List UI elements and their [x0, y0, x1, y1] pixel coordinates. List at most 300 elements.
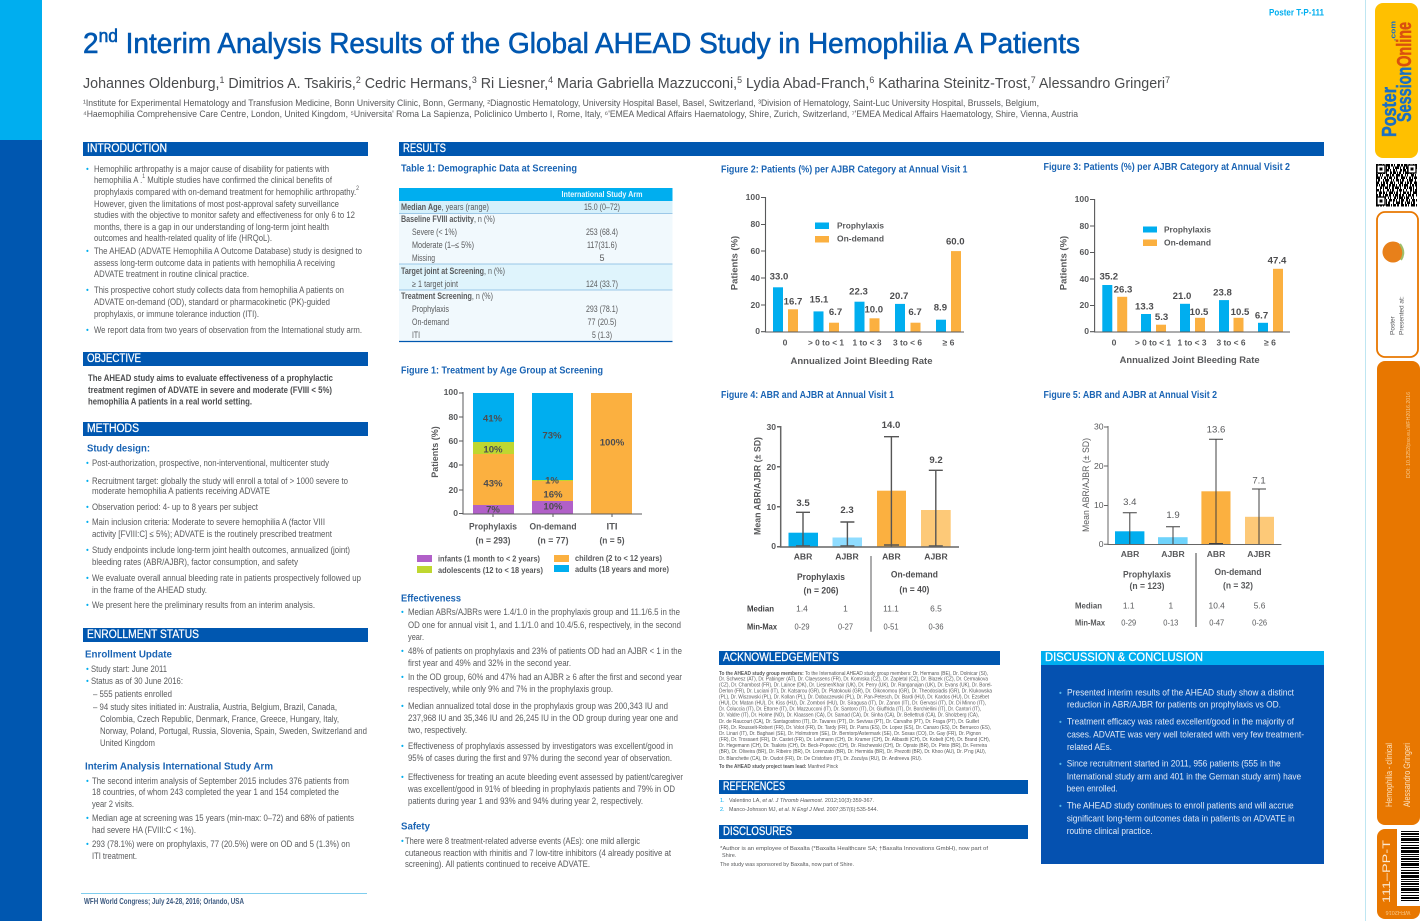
figure 1: treatment by age group: 16%: [543, 490, 563, 500]
panel: methods: We present here the preliminary results from an interim analysis.: [92, 600, 315, 610]
panel: acknowledgements: (FR), Dr. Rousselt-Robert (FR), Dr. Volot (FR), Dr. Tardy (FR), Dr. Parra (ES), Dr. Lopez (ES), Dr. Canaro (ES), Dr. Berrueco (ES),: [719, 725, 991, 731]
figure 1: treatment by age group: 100%: [600, 438, 625, 448]
figure 2: AJBR category visit 1: Prophylaxis: [837, 221, 884, 231]
panel: acknowledgements: (PL), Dr. Wiszowski (PL), Dr. Kollan (PL), Dr. Dobaczewski (PL), Dr. Pan-Petesch, Dr. Bardi (HU), Dr. Kardos (HU), Dr. Ezsébet: [719, 694, 990, 700]
figure 1: treatment by age group: 100: [444, 387, 458, 397]
panel: enrollment status: – 555 patients enrolled: [93, 689, 172, 699]
figure 4: ABR and AJBR visit 1: Mean ABR/AJBR (± SD): [752, 437, 764, 535]
figure 4: ABR and AJBR visit 1: ABR: [794, 552, 813, 562]
authors: 3: [472, 75, 477, 85]
figure 4: ABR and AJBR visit 1: On-demand: [891, 570, 938, 580]
text block: effectiveness and safety: [401, 594, 683, 869]
panel: methods: activity [FVIII:C] ≤ 5%); ADVATE is the routinely prescribed treatment: [92, 529, 332, 539]
figure 5: ABR and AJBR visit 2: 20: [1094, 461, 1104, 471]
panel: acknowledgements: Dr. Linari (IT), Dr. Baghaei (SE), Dr. Holmstrom (SE), Dr. Berntorp/Astermark (SE), Dr. Sosas (CO), Dr. Gay (FR), Dr. Pignon: [719, 731, 981, 737]
authors: Maria Gabriella Mazzucconi,: [553, 76, 737, 92]
figure 5: ABR and AJBR visit 2: On-demand: [1214, 567, 1262, 578]
figure 1: treatment by age group: ITI: [606, 522, 618, 532]
panel: enrollment status: ENROLLMENT STATUS: [87, 629, 199, 641]
figure 1: treatment by age group: Prophylaxis: [469, 522, 517, 532]
figure 2: AJBR category visit 1: 20: [750, 300, 760, 310]
icon: congress logo: [1382, 242, 1404, 262]
figure 5: ABR and AJBR visit 2: Median: [1075, 601, 1102, 611]
text block: effectiveness and safety: first year and 49% and 32% in the second year.: [408, 658, 571, 668]
panel: acknowledgements: (FR), Dr. Trossaert (FR), Dr. Castet (FR), Dr. Lehmann (CH), Dr. Kramer (CH), Dr. Alibastti (CH), Dr. Kobelt (CH), Dr. Brand (CH),: [719, 737, 990, 743]
panel: acknowledgements: ACKNOWLEDGEMENTS: [723, 652, 839, 664]
text block: effectiveness and safety: patients during year 1 and 93% and 94% during year 2, respectively.: [408, 796, 643, 806]
text block: effectiveness and safety: Effectiveness: [401, 594, 461, 604]
text block: effectiveness and safety: There were 8 treatment-related adverse events (AEs): one mild allergic: [405, 836, 640, 846]
panel: introduction: outcomes and health-related quality of life (HRQoL).: [94, 233, 272, 243]
figure 5: ABR and AJBR visit 2: 0-13: [1163, 618, 1179, 628]
figure 1: treatment by age group: 60: [448, 436, 458, 446]
text block: effectiveness and safety: OD one for annual visit 1, and 1.1/1.0 and 10.4/5.6, respectively, in the second: [408, 620, 681, 630]
figure 5: ABR and AJBR visit 2: Min-Max: [1075, 618, 1105, 628]
panel: acknowledgements: Dr. Blanchette (CA), Dr. Oudot (FR), Dr. De Cristofaro (IT), Dr. Zozulya (RU), Dr. Andreeva (RU).: [719, 756, 922, 762]
text block: effectiveness and safety: •: [401, 702, 404, 710]
panel: methods: Observation period: 4- up to 8 years per subject: [92, 502, 258, 512]
panel: introduction: •: [86, 246, 89, 256]
authors: Dimitrios A. Tsakiris,: [224, 76, 356, 92]
figure 2: AJBR category visit 1: Figure 2: Patients (%) per AJBR Category at Annual Visit 1: [721, 164, 968, 176]
table 1: demographic data: 77 (20.5): [588, 317, 616, 327]
results header: [399, 142, 1324, 156]
figure 5: ABR and AJBR visit 2: 13.6: [1207, 424, 1225, 436]
sidebar logo: PosterSessionOnline: Poster: [1379, 87, 1401, 137]
figure 3: AJBR category visit 2: 13.3: [1135, 302, 1154, 312]
panel: enrollment status: 18 countries, of whom 243 completed the year 1 and 154 completed the: [92, 787, 339, 797]
panel: methods: moderate hemophilia A patients receiving ADVATE: [92, 486, 270, 496]
figure 4: ABR and AJBR visit 1: 0-51: [884, 622, 899, 632]
authors: Johannes Oldenburg,: [83, 76, 222, 92]
figure 2: AJBR category visit 1: 10.0: [864, 304, 883, 316]
panel: enrollment status: •: [86, 776, 89, 786]
figure 5: ABR and AJBR visit 2: 1.9: [1166, 510, 1180, 521]
table 1: demographic data: Missing: [412, 253, 435, 263]
figure 3: AJBR category visit 2: On-demand: [1164, 238, 1211, 248]
figure 3: AJBR category visit 2: > 0 to < 1: [1135, 338, 1171, 348]
figure 4: ABR and AJBR visit 1: Min-Max: [747, 622, 777, 632]
text block: effectiveness and safety: respectively, while only 9% and 7% in the prophylaxis group.: [408, 684, 613, 694]
figure 3: AJBR category visit 2: Figure 3: Patients (%) per AJBR Category at Annual Visit 2: [1044, 162, 1290, 173]
panel: discussion and conclusion: [1041, 651, 1324, 864]
figure 4: ABR and AJBR visit 1: 10: [766, 502, 776, 512]
figure 2: AJBR category visit 1: 0: [755, 326, 760, 336]
figure 5: ABR and AJBR visit 2: 1.1: [1123, 601, 1135, 611]
panel: discussion and conclusion: significant long-term outcomes data in patients on ADVATE in: [1067, 814, 1295, 824]
panel: methods: METHODS: [87, 423, 139, 435]
panel: enrollment status: Status as of 30 June 2016:: [91, 676, 183, 686]
figure 1: treatment by age group: Patients (%): [430, 426, 440, 478]
table 1: demographic data: Median Age, years (range): [401, 202, 489, 212]
panel: objective: The AHEAD study aims to evaluate effectiveness of a prophylactic: [88, 373, 333, 383]
figure 4: ABR and AJBR visit 1: Median: [747, 604, 774, 614]
panel: introduction: hemophilia A .: [94, 175, 150, 185]
panel: acknowledgements: Dr. Valdre (IT), Dr. Holme (NO), Dr. Klaassen (CA), Dr. Samad (CA), Dr. Sinha (CA), Dr. Bellettruti (CA), Dr. Sholzberg (CA),: [719, 712, 979, 718]
figure 1: treatment by age group: (n = 5): [600, 536, 624, 546]
text block: effectiveness and safety: •: [401, 672, 404, 682]
panel: enrollment status: •: [86, 664, 89, 674]
sidebar divider line: [1364, 0, 1366, 921]
figure 5: ABR and AJBR visit 2: 0-26: [1252, 618, 1267, 628]
figure 4: ABR and AJBR visit 1: AJBR: [924, 552, 948, 562]
figure 1: treatment by age group: (n = 77): [538, 536, 568, 546]
panel: enrollment status: The second interim analysis of September 2015 includes 376 patients from: [92, 776, 349, 786]
panel: discussion and conclusion: Presented interim results of the AHEAD study show a distinct: [1067, 688, 1294, 698]
figure 2: AJBR category visit 1: On-demand: [837, 234, 884, 244]
authors: 1: [219, 75, 224, 85]
figure 1: treatment by age group: 40: [448, 460, 458, 470]
figure 5: ABR and AJBR visit 2: ABR: [1121, 549, 1140, 559]
figure 2: AJBR category visit 1: 60.0: [946, 236, 965, 248]
table 1: demographic data: 5 (1.3): [592, 330, 612, 340]
panel: enrollment status: •: [86, 814, 89, 822]
panel: introduction: However, given the limitations of most post-approval safety surveillance: [94, 199, 339, 209]
figure 4: ABR and AJBR visit 1: 11.1: [883, 604, 899, 614]
table 1: demographic data: 253 (68.4): [586, 227, 618, 237]
panel: enrollment status: ITI treatment.: [92, 851, 137, 861]
presented-at card: Poster: [1390, 315, 1396, 335]
panel: acknowledgements: (BR), Dr. Oliveira (BR), Dr. Ribeiro (BR), Dr. Lorenzato (BR), Dr. Hermida (BR), Dr. Prezotti (BR), Dr. Khoo (AU), Dr. P'ng (AU),: [719, 749, 986, 755]
figure 1: treatment by age group: infants (1 month to < 2 years): [438, 554, 540, 564]
figure 2: AJBR category visit 1: 6.7: [908, 307, 922, 318]
panel: methods: •: [86, 518, 89, 526]
figure 4: ABR and AJBR visit 1: 6.5: [930, 604, 942, 614]
panel: discussion and conclusion: reduction in ABR/AJBR for patients on prophylaxis vs OD.: [1067, 700, 1281, 710]
figure 4: ABR and AJBR visit 1: Figure 4: ABR and AJBR at Annual Visit 1: [721, 390, 894, 401]
figure 5: ABR and AJBR visit 2: (n = 123): [1130, 581, 1164, 592]
panel: acknowledgements: Dr. Hegemann (CH), Dr. Tsakiris (CH), Dr. Beck-Popovic (CH), Dr. Rischewski (CH), Dr. Oprato (BR), Dr. Pinto (BR), Dr. Ferreira: [719, 743, 987, 749]
panel: introduction: •: [86, 326, 89, 334]
table 1: demographic data: Baseline FVIII activity, n (%): [401, 214, 495, 224]
authors: 6: [869, 75, 874, 85]
text block: effectiveness and safety: cutaneous reaction with rhinitis and 7 low-titre inhibitors (4 already positive at: [405, 848, 671, 858]
figure 2: AJBR category visit 1: > 0 to < 1: [808, 338, 844, 348]
panel: enrollment status: •: [86, 840, 89, 848]
figure 5: ABR and AJBR visit 2: 3.4: [1123, 497, 1137, 508]
table 1: demographic data: 5: [599, 253, 605, 263]
panel: discussion and conclusion: •: [1059, 802, 1062, 810]
figure 1: treatment by age group: adults (18 years and more): [575, 564, 669, 574]
sidebar logo: PosterSessionOnline: .com: [1390, 21, 1398, 41]
panel: methods: Recruitment target: globally the study will enroll a total of > 1000 severe to: [92, 476, 348, 486]
panel: disclosures: [719, 825, 1028, 868]
figure 5: ABR and AJBR visit 2: ABR: [1207, 549, 1226, 559]
text block: effectiveness and safety: two, respectively.: [408, 725, 467, 735]
text block: effectiveness and safety: Median ABRs/AJBRs were 1.4/1.0 in the prophylaxis group and 11.1/6.5 in the: [408, 607, 680, 617]
figure 4: ABR and AJBR visit 1: 0-29: [794, 622, 810, 632]
figure 3: AJBR category visit 2: 20: [1079, 300, 1089, 310]
panel: acknowledgements: To the AHEAD study project team lead: Manfred Pinck: [719, 764, 838, 770]
table 1: demographic data: 293 (78.1): [586, 304, 618, 314]
panel: enrollment status: Study start: June 2011: [91, 664, 167, 674]
figure 4: ABR and AJBR visit 1: 9.2: [929, 455, 943, 466]
figure 3: AJBR category visit 2: Patients (%): [1058, 236, 1070, 290]
figure 5: ABR and AJBR visit 2: Figure 5: ABR and AJBR at Annual Visit 2: [1044, 390, 1217, 401]
figure 5: ABR and AJBR visit 2: AJBR: [1247, 549, 1271, 559]
panel: objective: [83, 352, 368, 406]
table 1: demographic data: On-demand: [412, 317, 449, 327]
figure 4: ABR and AJBR visit 1: 3.5: [796, 498, 810, 509]
text block: effectiveness and safety: screening). All patients continued to receive ADVATE.: [405, 859, 590, 869]
figure 4: ABR and AJBR visit 1: Prophylaxis: [797, 572, 845, 583]
panel: enrollment status: United Kingdom: [100, 738, 155, 748]
panel: disclosures: DISCLOSURES: [723, 826, 792, 838]
figure 2: AJBR category visit 1: Patients (%): [730, 236, 740, 290]
figure 3: AJBR category visit 2: 100: [1075, 194, 1089, 204]
figure 5: ABR and AJBR visit 2: (n = 32): [1223, 580, 1253, 592]
figure 3: AJBR category visit 2: 60: [1079, 247, 1089, 257]
panel: disclosures: *Author is an employee of Baxalta (*Baxalta Healthcare SA; †Baxalta Innovations GmbH), now part of: [720, 846, 989, 852]
figure 3: AJBR category visit 2: 40: [1079, 274, 1089, 284]
figure 2: AJBR category visit 1: 22.3: [849, 286, 868, 298]
affiliations: ¹Institute for Experimental Hematology and Transfusion Medicine, Bonn University Clinic, Bonn, Germany, ²Diagnostic Hematology, University Hospital Basel, Basel, Switzerland, ³Division of Hematology, Saint-Luc University Hospital, Brussels, Belgium,: [83, 98, 1039, 108]
panel: references: Valentino LA, et al. J Thromb Haemost. 2012;10(3):359-367.: [729, 798, 874, 804]
panel: references: 2.: [720, 807, 725, 813]
panel: acknowledgements: Derlon (FR), Dr. Luciani (IT), Dr. Katsarou (GR), Dr. Platokouki (GR), Dr. Oikonomou (GR), Dr. Theodosiadis (GR), Dr. Klukowska: [719, 688, 992, 694]
panel: enrollment status: Norway, Poland, Portugal, Russia, Slovenia, Spain, Sweden, Switzerland and: [100, 726, 367, 736]
figure 4: ABR and AJBR visit 1: 1: [843, 604, 848, 614]
table 1: demographic data: Table 1: Demographic Data at Screening: [401, 164, 577, 174]
panel: introduction: prophylaxis, or immune tolerance induction (ITI).: [94, 309, 259, 319]
presented-at card: [1377, 212, 1418, 357]
authors: Cedric Hermans,: [361, 76, 472, 92]
table 1: demographic data: Severe (< 1%): [412, 227, 457, 237]
panel: discussion and conclusion: •: [1059, 718, 1062, 726]
figure 5: ABR and AJBR visit 2: 10: [1094, 500, 1104, 510]
figure 3: AJBR category visit 2: 5.3: [1155, 312, 1168, 323]
panel: enrollment status: year 2 visits.: [92, 799, 134, 809]
panel: discussion and conclusion: related AEs.: [1067, 742, 1112, 753]
panel: introduction: We report data from two years of observation from the International study arm.: [94, 325, 362, 335]
panel: introduction: Hemophilic arthropathy is a major cause of disability for patients with: [94, 164, 329, 174]
figure 1: treatment by age group: 20: [448, 485, 458, 495]
table 1: demographic data: Target joint at Screening, n (%): [401, 266, 505, 276]
figure 4: ABR and AJBR visit 1: 1.4: [796, 604, 808, 614]
panel: enrollment status: Interim Analysis International Study Arm: [85, 762, 273, 772]
text block: effectiveness and safety: Effectiveness of prophylaxis assessed by investigators was excellent/good in: [408, 741, 673, 751]
panel: discussion and conclusion: routine clinical practice.: [1067, 826, 1153, 837]
panel: disclosures: Shire.: [722, 853, 737, 859]
panel: introduction: 1: [142, 174, 146, 180]
panel: methods: Post-authorization, prospective, non-interventional, multicenter study: [92, 458, 329, 468]
figure 4: ABR and AJBR visit 1: 20: [766, 462, 776, 472]
panel: references: 1.: [720, 798, 725, 804]
figure 5: ABR and AJBR visit 2: Mean ABR/AJBR (± SD): [1081, 438, 1092, 532]
figure 3: AJBR category visit 2: 80: [1079, 221, 1089, 231]
figure 4: ABR and AJBR visit 1: (n = 206): [804, 586, 838, 596]
figure 2: AJBR category visit 1: ≥ 6: [943, 338, 955, 348]
orange side panel: Alessandro Gringeri: [1402, 743, 1412, 807]
figure 1: treatment by age group: adolescents (12 to < 18 years): [438, 565, 543, 575]
table 1: demographic data: 124 (33.7): [586, 279, 618, 289]
panel: methods: Study design:: [87, 444, 150, 454]
panel: introduction: •: [86, 164, 89, 174]
table 1: demographic data: ≥ 1 target joint: [412, 279, 458, 289]
figure 3: AJBR category visit 2: 10.5: [1231, 307, 1250, 318]
results header: RESULTS: [403, 143, 446, 155]
panel: methods: Main inclusion criteria: Moderate to severe hemophilia A (factor VIII: [92, 517, 325, 527]
panel: methods: •: [86, 546, 89, 554]
figure 2: AJBR category visit 1: 16.7: [784, 296, 802, 308]
text block: effectiveness and safety: year.: [408, 632, 424, 642]
figure 1: treatment by age group: 7%: [486, 504, 500, 516]
panel: discussion and conclusion: Treatment efficacy was rated excellent/good in the majority of: [1067, 716, 1294, 728]
panel: introduction: 2: [356, 186, 360, 192]
panel: methods: [83, 422, 368, 610]
panel: introduction: studies with the objective to monitor safety and effectiveness for only 6 to 12: [94, 210, 355, 220]
authors: Katharina Steinitz-Trost,: [874, 76, 1031, 92]
sidebar logo: PosterSessionOnline: [1375, 3, 1418, 158]
poster code and barcode: 111–PP-T: [1381, 840, 1393, 903]
text block: effectiveness and safety: •: [401, 646, 404, 656]
text block: effectiveness and safety: 48% of patients on prophylaxis and 23% of patients OD had an AJBR < 1 in the: [408, 646, 682, 656]
figure 1: treatment by age group: 10%: [543, 502, 563, 512]
figure 3: AJBR category visit 2: Annualized Joint Bleeding Rate: [1120, 355, 1260, 366]
figure 4: ABR and AJBR visit 1: 14.0: [882, 420, 900, 431]
affiliations: [83, 98, 1078, 119]
panel: introduction: ADVATE on-demand (OD), standard or pharmacokinetic (PK)-guided: [94, 297, 330, 307]
figure 3: AJBR category visit 2: 0: [1084, 326, 1089, 336]
figure 3: AJBR category visit 2: 23.8: [1213, 288, 1232, 298]
figure 2: AJBR category visit 1: Annualized Joint Bleeding Rate: [790, 356, 932, 367]
figure 3: AJBR category visit 2: 35.2: [1099, 272, 1118, 282]
figure 1: treatment by age group: [401, 366, 669, 575]
figure 3: AJBR category visit 2: 1 to < 3: [1178, 338, 1207, 348]
figure 1: treatment by age group: On-demand: [530, 522, 577, 532]
panel: discussion and conclusion: •: [1059, 760, 1062, 768]
panel: acknowledgements: [719, 651, 1000, 770]
figure 3: AJBR category visit 2: 26.3: [1114, 284, 1132, 296]
orange side panel: DOI: 10.3252/pso.eu.WFH2016.2016: [1406, 392, 1412, 478]
authors: 5: [737, 75, 742, 85]
panel: disclosures: The study was sponsored by Baxalta, now part of Shire.: [720, 862, 854, 868]
poster number: Poster T-P-111: [1269, 8, 1325, 18]
panel: discussion and conclusion: •: [1059, 688, 1062, 698]
panel: methods: We evaluate overall annual bleeding rate in patients prospectively followed up: [92, 573, 361, 583]
figure 1: treatment by age group: 1%: [545, 476, 559, 486]
panel: acknowledgements: Dr. de Raucourt (CA), Dr. Santagostino (IT), Dr. Tavares (PT), Dr. Sevivas (PT), Dr. Carvalho (PT), Dr. Fraga (PT), Dr. Guillet: [719, 719, 980, 725]
title: Interim Analysis Results of the Global AHEAD Study in Hemophilia A Patients: [118, 28, 1080, 60]
figure 2: AJBR category visit 1: 40: [750, 273, 760, 283]
table 1: demographic data: Moderate (1–≤ 5%): [412, 240, 474, 250]
table 1: demographic data: ITI: [412, 330, 420, 340]
figure 3: AJBR category visit 2: 10.5: [1190, 307, 1209, 318]
orange side panel: Hemophilia - clinical: [1384, 743, 1394, 807]
figure 2: AJBR category visit 1: 20.7: [890, 291, 908, 302]
panel: methods: •: [86, 600, 89, 610]
panel: discussion and conclusion: Since recruitment started in 2011, 956 patients (555 in the: [1067, 758, 1281, 770]
figure 1: treatment by age group: 41%: [483, 414, 503, 424]
figure 1: treatment by age group: 43%: [483, 478, 503, 490]
panel: introduction: Multiple studies have confirmed the clinical benefits of: [145, 175, 332, 185]
text block: effectiveness and safety: Effectiveness for treating an acute bleeding event assessed by patient/caregiver: [408, 772, 683, 782]
QR code: [1376, 164, 1417, 206]
figure 2: AJBR category visit 1: 3 to < 6: [893, 338, 922, 348]
figure 5: ABR and AJBR visit 2: 7.1: [1252, 476, 1266, 486]
panel: introduction: months, there is a gap in our understanding of long-term joint health: [94, 222, 329, 232]
text block: effectiveness and safety: Median annualized total dose in the prophylaxis group was 200,343 IU and: [408, 701, 668, 711]
left colour band: [0, 0, 42, 921]
figure 5: ABR and AJBR visit 2: Prophylaxis: [1123, 570, 1171, 580]
figure 4: ABR and AJBR visit 1: ABR: [882, 552, 901, 562]
text block: effectiveness and safety: was excellent/good in 91% of bleeding in prophylaxis patients and 79% in OD: [407, 784, 675, 794]
figure 5: ABR and AJBR visit 2: AJBR: [1161, 549, 1185, 559]
table 1: demographic data: Prophylaxis: [412, 304, 449, 314]
text block: effectiveness and safety: •: [401, 772, 404, 782]
figure 2: AJBR category visit 1: 80: [750, 219, 760, 229]
panel: objective: hemophilia A patients in a real world setting.: [88, 396, 252, 406]
figure 4: ABR and AJBR visit 1: 2.3: [840, 505, 854, 516]
figure 5: ABR and AJBR visit 2: 30: [1094, 422, 1104, 432]
presented-at card: Presented at:: [1398, 296, 1406, 335]
figure 5: ABR and AJBR visit 2: [1044, 390, 1281, 628]
panel: discussion and conclusion: International study arm and 401 in the German study arm) have: [1067, 772, 1301, 782]
figure 5: ABR and AJBR visit 2: 0-47: [1209, 618, 1225, 628]
figure 2: AJBR category visit 1: 60: [750, 246, 760, 256]
text block: effectiveness and safety: •: [401, 836, 404, 846]
figure 1: treatment by age group: (n = 293): [476, 536, 510, 546]
poster code and barcode: WFH2016: [1386, 909, 1410, 915]
table 1: demographic data: International Study Arm: [562, 189, 642, 199]
figure 3: AJBR category visit 2: Prophylaxis: [1164, 224, 1211, 234]
panel: acknowledgements: To the AHEAD study group members: To the International AHEAD study group members: Dr. Hermans (BE), Dr. Dolnicar (SI),: [719, 671, 988, 677]
figure 4: ABR and AJBR visit 1: 0: [771, 541, 776, 551]
figure 4: ABR and AJBR visit 1: (n = 40): [899, 584, 929, 596]
figure 1: treatment by age group: children (2 to < 12 years): [575, 553, 662, 563]
poster code and barcode: [1377, 829, 1420, 919]
figure 4: ABR and AJBR visit 1: AJBR: [835, 552, 859, 562]
table 1: demographic data: Treatment Screening, n (%): [401, 291, 493, 301]
figure 4: ABR and AJBR visit 1: [721, 390, 959, 632]
authors: Lydia Abad-Franch,: [742, 76, 869, 92]
figure 3: AJBR category visit 2: ≥ 6: [1264, 338, 1276, 348]
panel: acknowledgements: (HU), Dr. Matan (HU), Dr. Kiss (HU), Dr. Zombori (HU), Dr. Siragusa (IT), Dr. Zanon (IT), Dr. Gervasi (IT), Dr. Di Minno (IT),: [719, 700, 986, 706]
figure 1: treatment by age group: 73%: [542, 430, 562, 442]
title: 2: [83, 28, 99, 60]
text block: effectiveness and safety: 237,968 IU and 35,346 IU and 26,245 IU in the OD group during year one and: [408, 713, 678, 723]
panel: methods: Study endpoints include long-term joint health outcomes, annualized (joint): [92, 545, 350, 555]
figure 3: AJBR category visit 2: 47.4: [1268, 256, 1287, 266]
panel: methods: •: [86, 574, 89, 582]
panel: enrollment status: Median age at screening was 15 years (min-max: 0–72) and 68% of patients: [92, 813, 354, 823]
table 1: demographic data: 117(31.6): [587, 240, 617, 250]
authors: 7: [1165, 75, 1170, 85]
figure 3: AJBR category visit 2: 21.0: [1173, 291, 1191, 302]
panel: enrollment status: 293 (78.1%) were on prophylaxis, 77 (20.5%) were on OD and 5 (1.3%) on: [92, 839, 350, 849]
affiliations: ⁴Haemophilia Comprehensive Care Centre, London, United Kingdom, ⁵Universita' Roma La Sapienza, Policlinico Umberto I, Rome, Italy, ⁶'EMEA Medical Affairs Haematology, Shire, Zurich, Switzerland, ⁷'EMEA Medical Affairs Haematology, Shire, Vienna, Austria: [83, 109, 1078, 119]
figure 1: treatment by age group: 80: [448, 412, 458, 422]
figure 2: AJBR category visit 1: [721, 164, 968, 367]
figure 2: AJBR category visit 1: 15.1: [810, 294, 829, 306]
text block: effectiveness and safety: •: [401, 608, 404, 616]
figure 3: AJBR category visit 2: 3 to < 6: [1216, 338, 1246, 348]
panel: references: Manco-Johnson MJ, et al. N Engl J Med. 2007;357(6):535-544.: [729, 807, 878, 813]
panel: objective: OBJECTIVE: [87, 353, 141, 365]
figure 2: AJBR category visit 1: 33.0: [770, 272, 788, 282]
panel: references: [719, 780, 1028, 813]
figure 3: AJBR category visit 2: 0: [1112, 338, 1117, 348]
panel: methods: •: [86, 502, 89, 512]
panel: introduction: The AHEAD (ADVATE Hemophilia A Outcome Database) study is designed to: [94, 246, 362, 256]
panel: methods: •: [86, 458, 89, 468]
figure 2: AJBR category visit 1: 0: [783, 338, 788, 348]
figure 2: AJBR category visit 1: 6.7: [829, 307, 842, 318]
sidebar logo: PosterSessionOnline: SessionOnline: [1394, 22, 1416, 122]
figure 5: ABR and AJBR visit 2: 0: [1099, 539, 1104, 549]
figure 5: ABR and AJBR visit 2: 5.6: [1254, 601, 1266, 611]
panel: acknowledgements: (CZ), Dr. Chambost (FR), Dr. Lainoe (DK), Dr. Liesner/Khair (UK), Dr. Perry (UK), Dr. Ranganajan (UK), Dr. Evans (UK), Dr. Borel-: [719, 682, 992, 688]
